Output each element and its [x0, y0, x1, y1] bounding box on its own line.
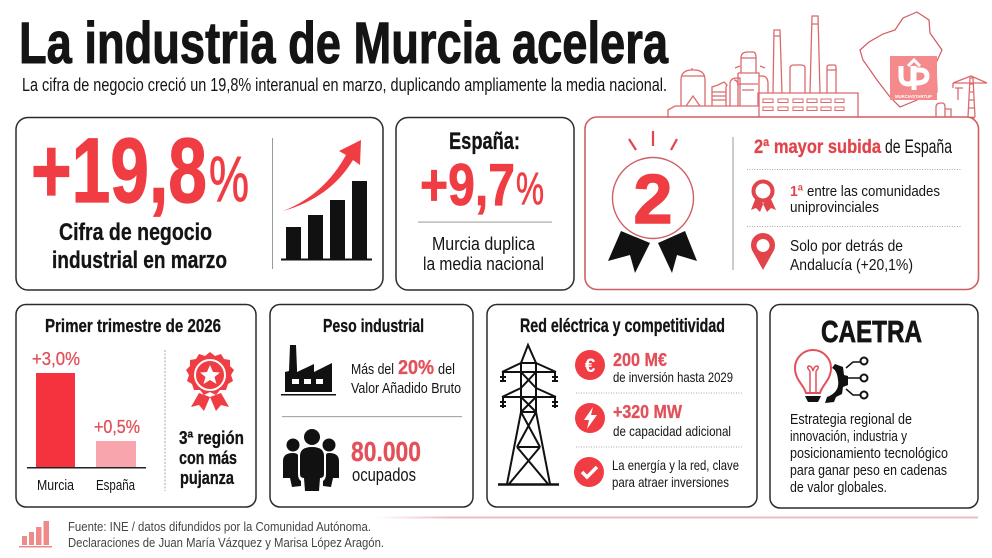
- map of Murcia with logo: [860, 12, 942, 107]
- heading: España:: [449, 128, 520, 155]
- bar chart: Murcia: [37, 477, 75, 494]
- description: Cifra de negocio: [59, 219, 212, 246]
- heading: de España: [885, 137, 952, 158]
- text: tercera región: [179, 428, 244, 488]
- text: uniprovinciales: uniprovinciales: [790, 199, 879, 216]
- text: Andalucía: Solo por detrás de: [790, 238, 903, 255]
- description: la media nacional: [423, 254, 544, 274]
- description: de valor globales.: [790, 479, 887, 496]
- heading: CAETRA: [821, 314, 922, 349]
- description: [52, 219, 227, 274]
- description: Murcia duplica: [432, 234, 536, 254]
- panel: España: [396, 118, 574, 290]
- text: valor añadido: Más del: [351, 361, 394, 378]
- icon: bulb, gear and circuit: [795, 350, 868, 403]
- panel: red eléctrica: [487, 304, 757, 507]
- illustration: industrial skyline: [668, 16, 987, 118]
- panel: primer trimestre: [16, 304, 256, 507]
- panel: CAETRA: [770, 304, 978, 508]
- row: capacidad: de capacidad adicional: [613, 423, 731, 439]
- icon: people: [283, 429, 339, 491]
- description: posicionamiento tecnológico: [790, 445, 948, 462]
- text: uniprovinciales: 1ª: [790, 183, 803, 200]
- text: tercera región: con más: [179, 448, 237, 468]
- number: %: [516, 163, 544, 214]
- icon: source bars: [19, 521, 52, 548]
- icon: medal number 2: 2: [634, 160, 672, 238]
- row: inversión: 200 M€: [613, 350, 667, 370]
- text: Andalucía: [790, 238, 913, 274]
- heading: 2ª mayor subida: [754, 137, 881, 158]
- description: industrial en marzo: [52, 247, 227, 274]
- row: capacidad: [575, 402, 731, 439]
- text: valor añadido: 20%: [398, 357, 434, 379]
- description: Estrategia regional de: [790, 411, 912, 428]
- big number: +19,8: [31, 120, 207, 222]
- source note: [68, 519, 384, 550]
- row: energía: [574, 457, 739, 490]
- row: energía: La energía y la red, clave: [612, 457, 739, 473]
- text: Andalucía: Andalucía (+20,1%): [790, 257, 913, 274]
- logo mark: [901, 60, 927, 90]
- map of Murcia with logo: MURCIASTARTUP: [895, 94, 932, 99]
- source note: Fuente: INE / datos difundidos por la Comunidad Autónoma.: [68, 519, 371, 534]
- description: [790, 411, 948, 496]
- icon: award: [751, 182, 776, 212]
- icon: location pin: [751, 233, 775, 270]
- bar chart: +3,0%: [32, 349, 80, 369]
- number: +9,7: [420, 152, 515, 218]
- text: ocupados: [351, 436, 421, 485]
- text: valor añadido: Valor Añadido Bruto: [351, 380, 461, 397]
- text: tercera región: 3ª región: [179, 428, 244, 448]
- text: tercera región: pujanza: [180, 468, 235, 488]
- description: para ganar peso en cadenas: [790, 462, 947, 479]
- heading: Red eléctrica y competitividad: [520, 316, 725, 337]
- panel: segunda mayor subida: [585, 117, 978, 290]
- row: energía: para atraer inversiones: [612, 474, 729, 490]
- text: valor añadido: del: [438, 361, 455, 378]
- bar chart: España: [96, 477, 136, 494]
- subtitle: La cifra de negocio creció un 19,8% interanual en marzo, duplicando ampliamente la media nacional.: [22, 75, 667, 95]
- icon: rosette: [186, 352, 234, 411]
- big number: %: [209, 143, 249, 215]
- bar chart: [27, 349, 146, 494]
- bar chart icon with arrow: [281, 140, 372, 260]
- description: innovación, industria y: [790, 428, 907, 445]
- row: inversión: de inversión hasta 2029: [613, 369, 733, 385]
- row: capacidad: +320 MW: [613, 402, 682, 422]
- heading: Primer trimestre de 2026: [45, 316, 221, 336]
- title: La industria de Murcia acelera: [19, 11, 669, 76]
- text: uniprovinciales: [790, 183, 940, 216]
- text: ocupados: ocupados: [352, 465, 416, 485]
- heading: Peso industrial: [323, 316, 424, 336]
- panel: peso industrial: [270, 304, 473, 507]
- text: valor añadido: [351, 357, 461, 397]
- text: ocupados: 80.000: [351, 436, 421, 467]
- bar chart: +0,5%: [94, 417, 140, 437]
- source note: Declaraciones de Juan María Vázquez y Marisa López Aragón.: [68, 535, 384, 550]
- icon: electricity pylon: [498, 345, 559, 484]
- row: inversión: [575, 350, 733, 385]
- icon: medal number 2: [608, 131, 697, 273]
- panel: cifra de negocio: [16, 118, 383, 290]
- description: [423, 234, 544, 274]
- text: uniprovinciales: entre las comunidades: [807, 183, 940, 200]
- row: inversión: €: [585, 356, 596, 377]
- icon: factory: [281, 345, 336, 396]
